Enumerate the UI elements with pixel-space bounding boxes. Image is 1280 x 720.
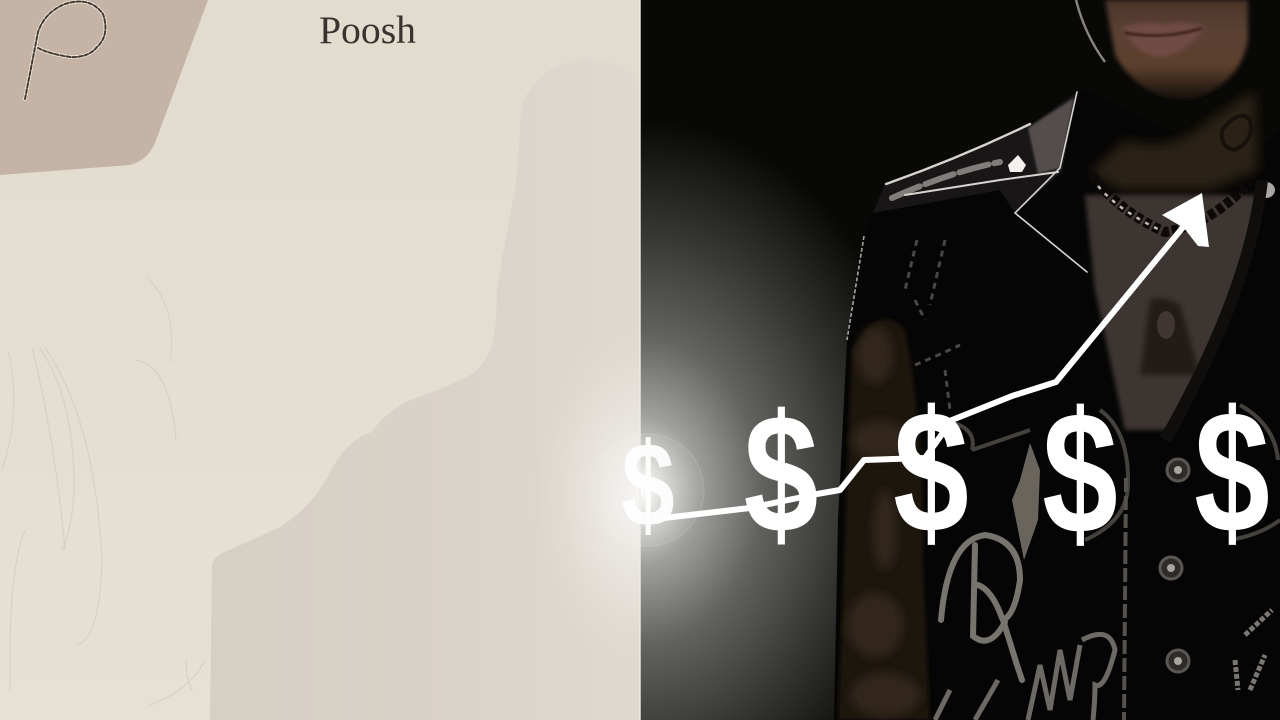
vest buttons xyxy=(1160,459,1189,672)
dollar 2: $ xyxy=(744,380,818,569)
light burst behind first dollar xyxy=(640,120,930,720)
vest light patch xyxy=(1012,443,1040,560)
lower vest graffiti xyxy=(935,634,1115,720)
neck with tattoos xyxy=(1090,90,1258,190)
arm tattoo patches xyxy=(847,327,920,717)
dollar 1: $ xyxy=(621,419,675,553)
lapel edge xyxy=(1165,180,1262,440)
growth line xyxy=(664,226,1184,518)
chest tattoo xyxy=(1140,298,1200,375)
dollar signs row xyxy=(621,375,1270,571)
dollar 3: $ xyxy=(893,375,969,570)
right lower sleeve scribble xyxy=(1235,610,1272,690)
vest ornament scrolls behind dollars xyxy=(940,405,1280,540)
tattooed arm xyxy=(838,319,930,720)
body silhouette xyxy=(834,268,884,720)
jacket sleeve texture xyxy=(905,240,960,410)
dollar 4: $ xyxy=(1042,376,1118,571)
necklace xyxy=(1092,176,1250,232)
arm edge highlight xyxy=(847,236,864,340)
chest xyxy=(1085,195,1258,430)
left side light glow xyxy=(520,320,640,670)
panel: logo tile xyxy=(0,0,208,175)
first dollar halo xyxy=(592,434,704,546)
logo: handwritten P xyxy=(25,2,105,99)
faint hair lines xyxy=(2,278,205,705)
jacket collar xyxy=(873,92,1077,213)
panel: left cream background xyxy=(0,0,640,720)
lips xyxy=(1123,23,1205,57)
chart: rising growth arrow xyxy=(664,193,1209,518)
patch: R and A graffiti xyxy=(941,535,1022,680)
face and jaw xyxy=(1105,0,1248,100)
decorative grey silhouette shape xyxy=(210,59,640,720)
vest front seam xyxy=(1124,478,1126,720)
lip line xyxy=(1125,28,1202,36)
button highlights xyxy=(1167,466,1182,665)
right collar detail xyxy=(1266,182,1275,198)
hair strand xyxy=(1076,0,1105,62)
neck tattoo badge xyxy=(1222,116,1251,150)
collar bright triangle xyxy=(1028,98,1074,174)
divider between panels xyxy=(639,0,641,720)
collar stud xyxy=(1008,155,1026,172)
illustration: man in leather jacket xyxy=(834,0,1280,720)
panel: right dark photo background xyxy=(640,0,1280,720)
collar highlights xyxy=(886,92,1087,272)
logo tile shape xyxy=(0,0,208,175)
dollar 5: $ xyxy=(1194,375,1270,570)
arrow head xyxy=(1162,193,1209,247)
heading: Poosh wordmark: Poosh xyxy=(319,9,416,52)
